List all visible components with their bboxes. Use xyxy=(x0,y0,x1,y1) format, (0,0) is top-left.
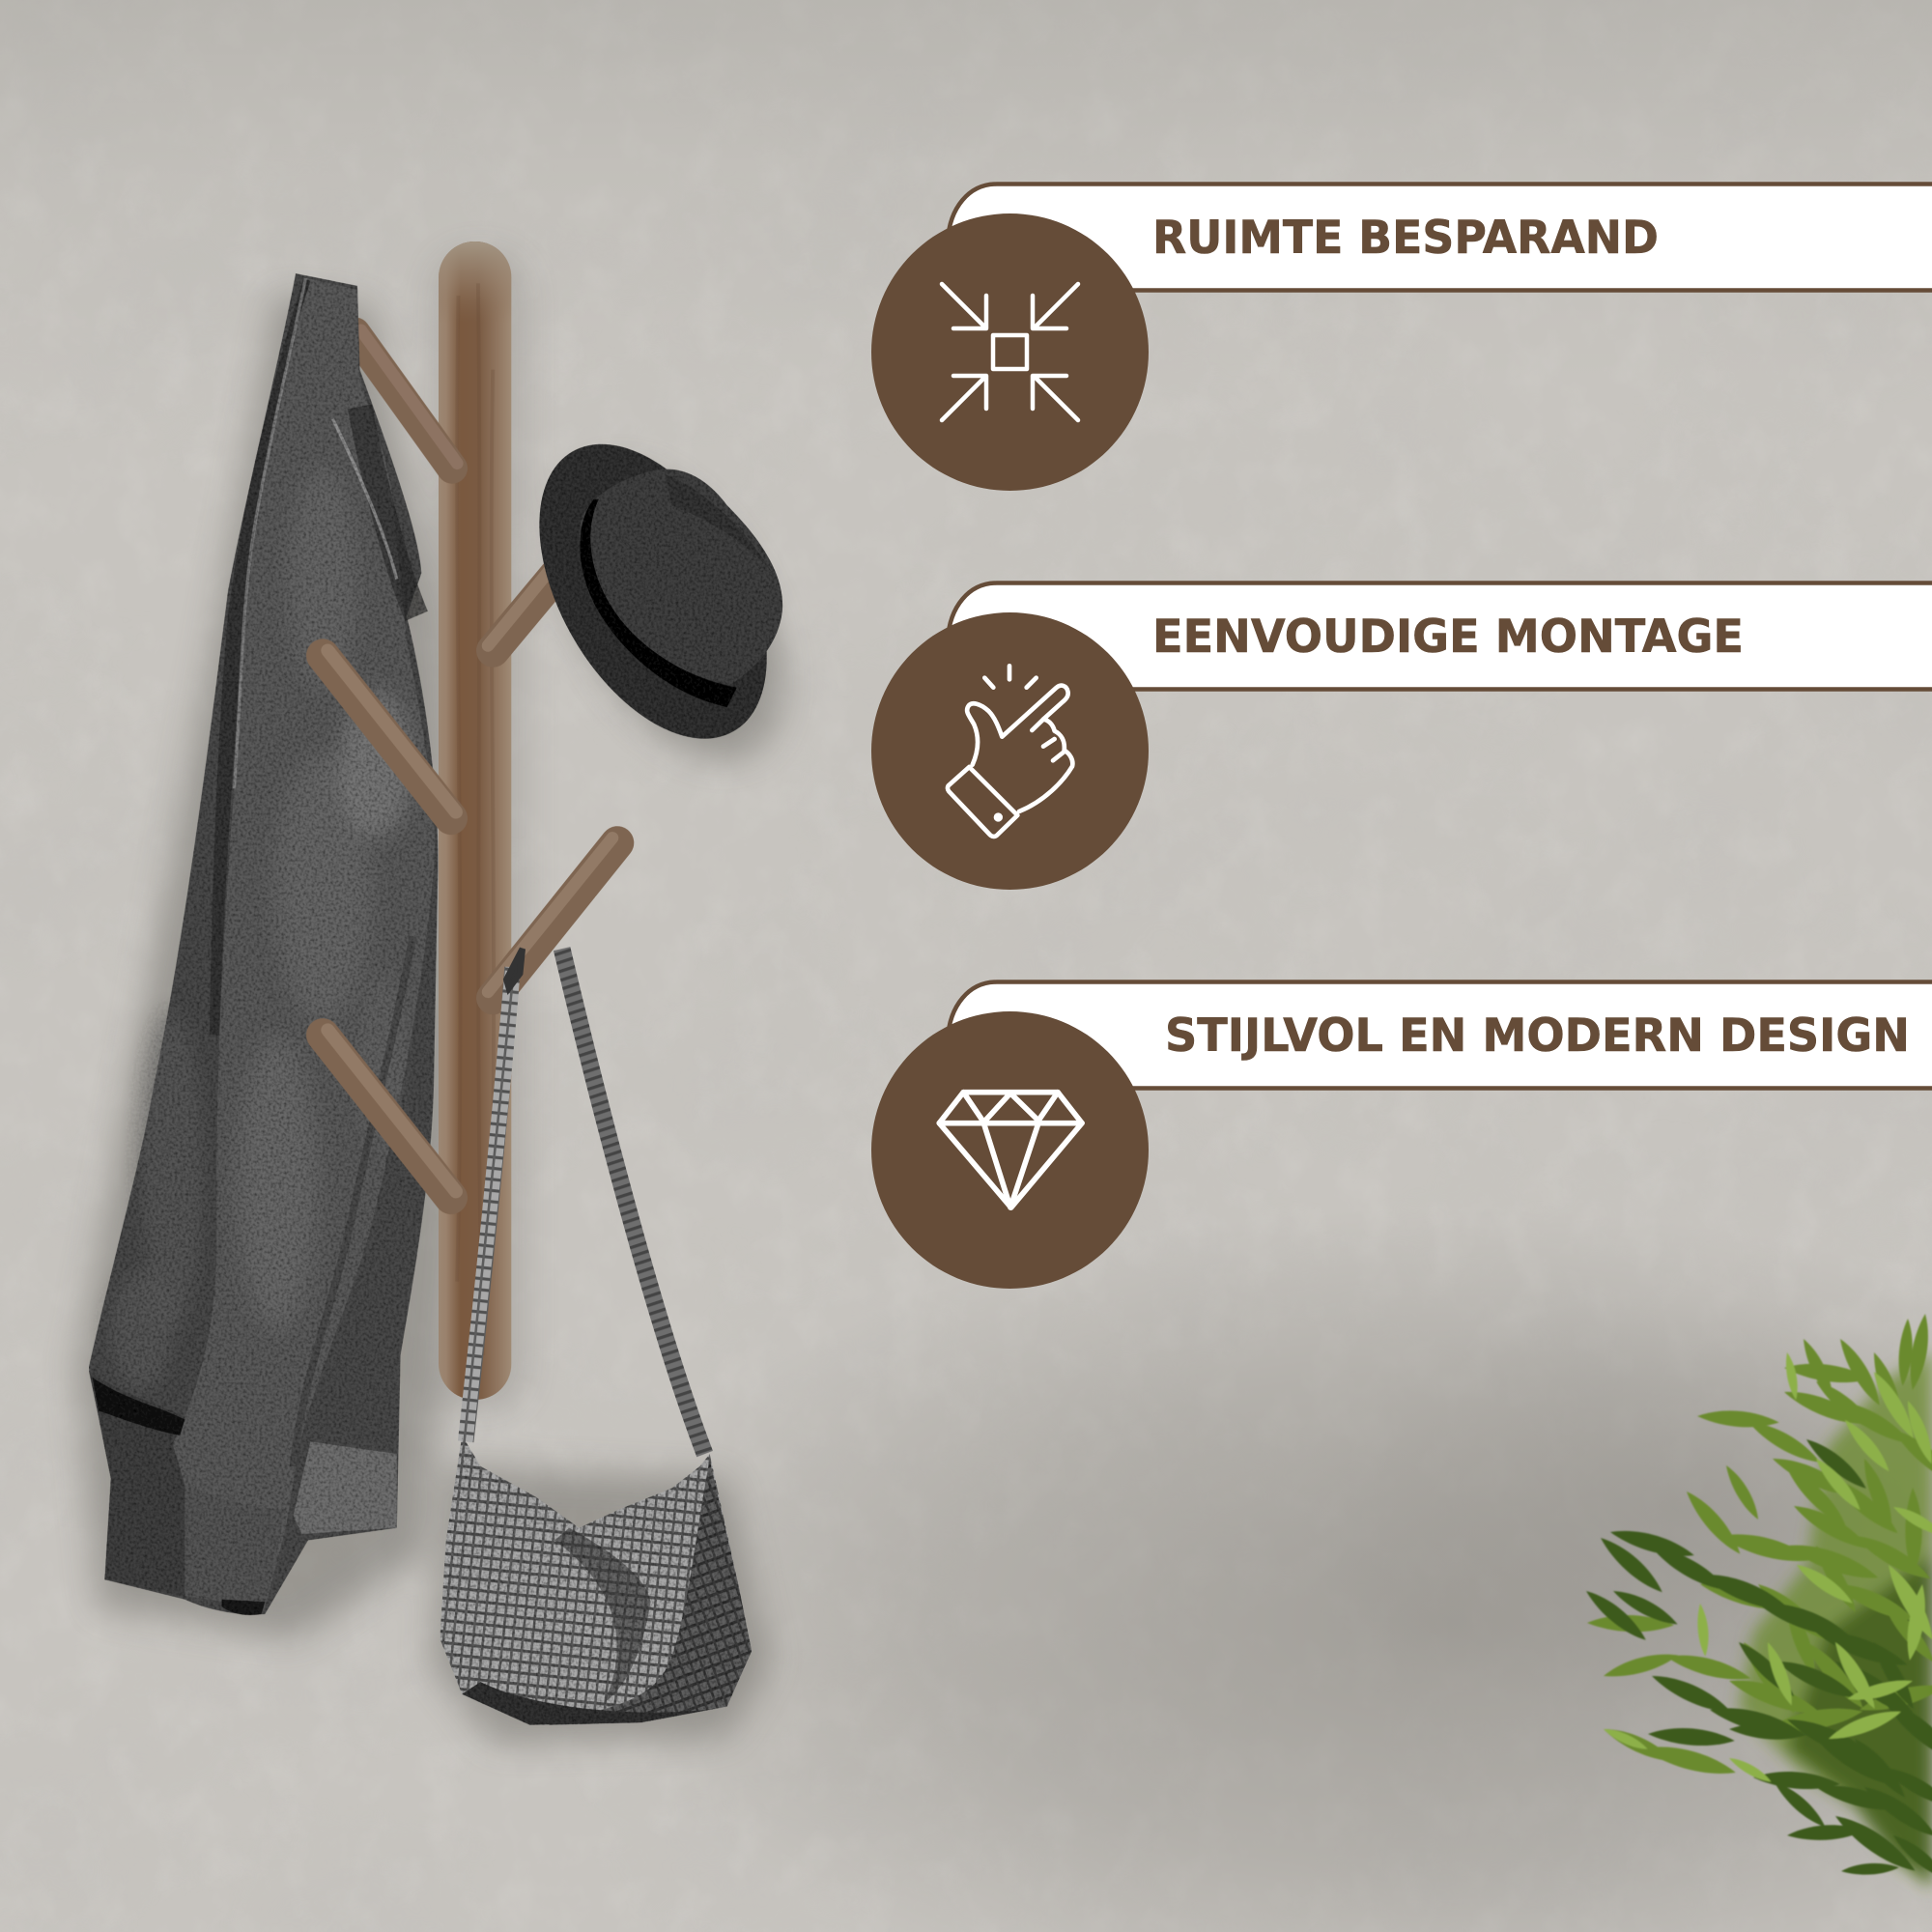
cast shadows xyxy=(76,252,829,1744)
banner xyxy=(948,184,1932,290)
coat rack with clothes xyxy=(76,242,829,1744)
feature 2: eenvoudige montage xyxy=(871,583,1932,890)
pegs: right xyxy=(488,564,617,998)
feature 1: ruimte besparend xyxy=(871,184,1932,491)
heading: RUIMTE BESPARAND xyxy=(1152,212,1659,265)
dark green leaves xyxy=(1582,1433,1932,1884)
hat brim xyxy=(493,406,813,778)
mid green leaves xyxy=(1587,1313,1932,1781)
peg: top left xyxy=(355,330,457,469)
coat cuffs xyxy=(89,1370,185,1597)
light green leaves xyxy=(1602,1351,1932,1786)
hat band xyxy=(580,499,737,707)
coat xyxy=(89,273,438,1615)
banner xyxy=(948,583,1932,690)
icon circle xyxy=(871,1011,1149,1289)
coat back layer xyxy=(89,273,438,1614)
feature 3: stijlvol en modern design xyxy=(871,981,1932,1289)
plant xyxy=(1582,1313,1932,1889)
bag xyxy=(440,949,752,1725)
hat crown xyxy=(580,469,782,685)
wooden pole xyxy=(439,242,511,1400)
icon: snapping hand xyxy=(948,666,1072,837)
icon circle xyxy=(871,213,1149,491)
pegs: left, in front of coat xyxy=(323,650,456,1198)
heading: EENVOUDIGE MONTAGE xyxy=(1152,611,1744,664)
icon: diamond xyxy=(939,1093,1082,1208)
coat folds xyxy=(273,752,372,1023)
coat front panel xyxy=(173,277,435,1608)
icon: compress arrows xyxy=(942,284,1078,420)
banner xyxy=(948,981,1932,1088)
bag straps xyxy=(466,967,513,1441)
plant foliage mass xyxy=(1739,1352,1932,1889)
hat xyxy=(493,406,813,778)
heading: STIJLVOL EN MODERN DESIGN xyxy=(1165,1009,1910,1063)
icon circle xyxy=(871,612,1149,890)
plant leaves xyxy=(1582,1313,1932,1884)
bag body xyxy=(440,1435,752,1725)
